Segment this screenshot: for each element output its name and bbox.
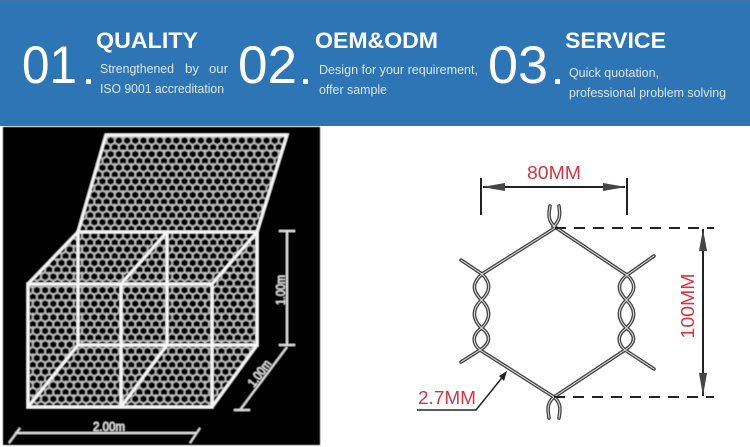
feature 01: quality: by <box>185 62 200 76</box>
feature 03: service <box>488 28 726 100</box>
feature 03: service: Quick quotation, <box>569 66 659 80</box>
mesh box body <box>28 232 257 407</box>
feature 01: quality: 01 <box>22 36 77 95</box>
dimension: width 2.00m <box>9 419 200 443</box>
dimension: depth 1.00m <box>234 347 287 410</box>
dimension: height 1.00m: 1.00m <box>273 275 288 305</box>
dimension: depth 1.00m: 1.00m <box>244 357 274 390</box>
feature 01: quality: ISO 9001 accreditation <box>100 82 224 96</box>
dimension: 100MM <box>554 228 714 397</box>
feature 01: quality: our <box>209 62 228 76</box>
dimension: 80MM <box>481 163 627 215</box>
dimension: 100MM: 100MM <box>678 274 698 338</box>
hexagon wire cell <box>461 206 654 418</box>
feature 01: quality: QUALITY <box>96 28 198 53</box>
panel: blue header band <box>0 0 750 126</box>
panel: hexagon mesh diagram <box>417 163 714 418</box>
dimension: width 2.00m: 2.00m <box>93 419 125 434</box>
dimension: height 1.00m <box>273 231 295 345</box>
feature 03: service: 03 <box>488 36 548 95</box>
feature 01: quality: Strengthened <box>100 62 174 76</box>
box frame lines <box>28 232 257 407</box>
feature 02: OEM and ODM: 02 <box>238 36 297 95</box>
feature 03: service: professional problem solving <box>569 86 726 100</box>
mesh lid <box>78 135 287 232</box>
panel: gabion box drawing <box>3 127 320 445</box>
feature 01: quality <box>22 28 228 96</box>
feature 02: OEM and ODM: offer sample <box>319 83 387 97</box>
feature 02: OEM and ODM: Design for your requirement, <box>319 63 478 77</box>
feature 03: service: SERVICE <box>565 28 666 53</box>
dimension: 80MM: 80MM <box>527 163 581 183</box>
feature 02: OEM and ODM <box>238 28 478 97</box>
callout: wire diameter 2.7MM: 2.7MM <box>418 388 476 408</box>
feature 02: OEM and ODM: OEM&ODM <box>315 28 438 53</box>
callout: wire diameter 2.7MM <box>417 371 507 410</box>
